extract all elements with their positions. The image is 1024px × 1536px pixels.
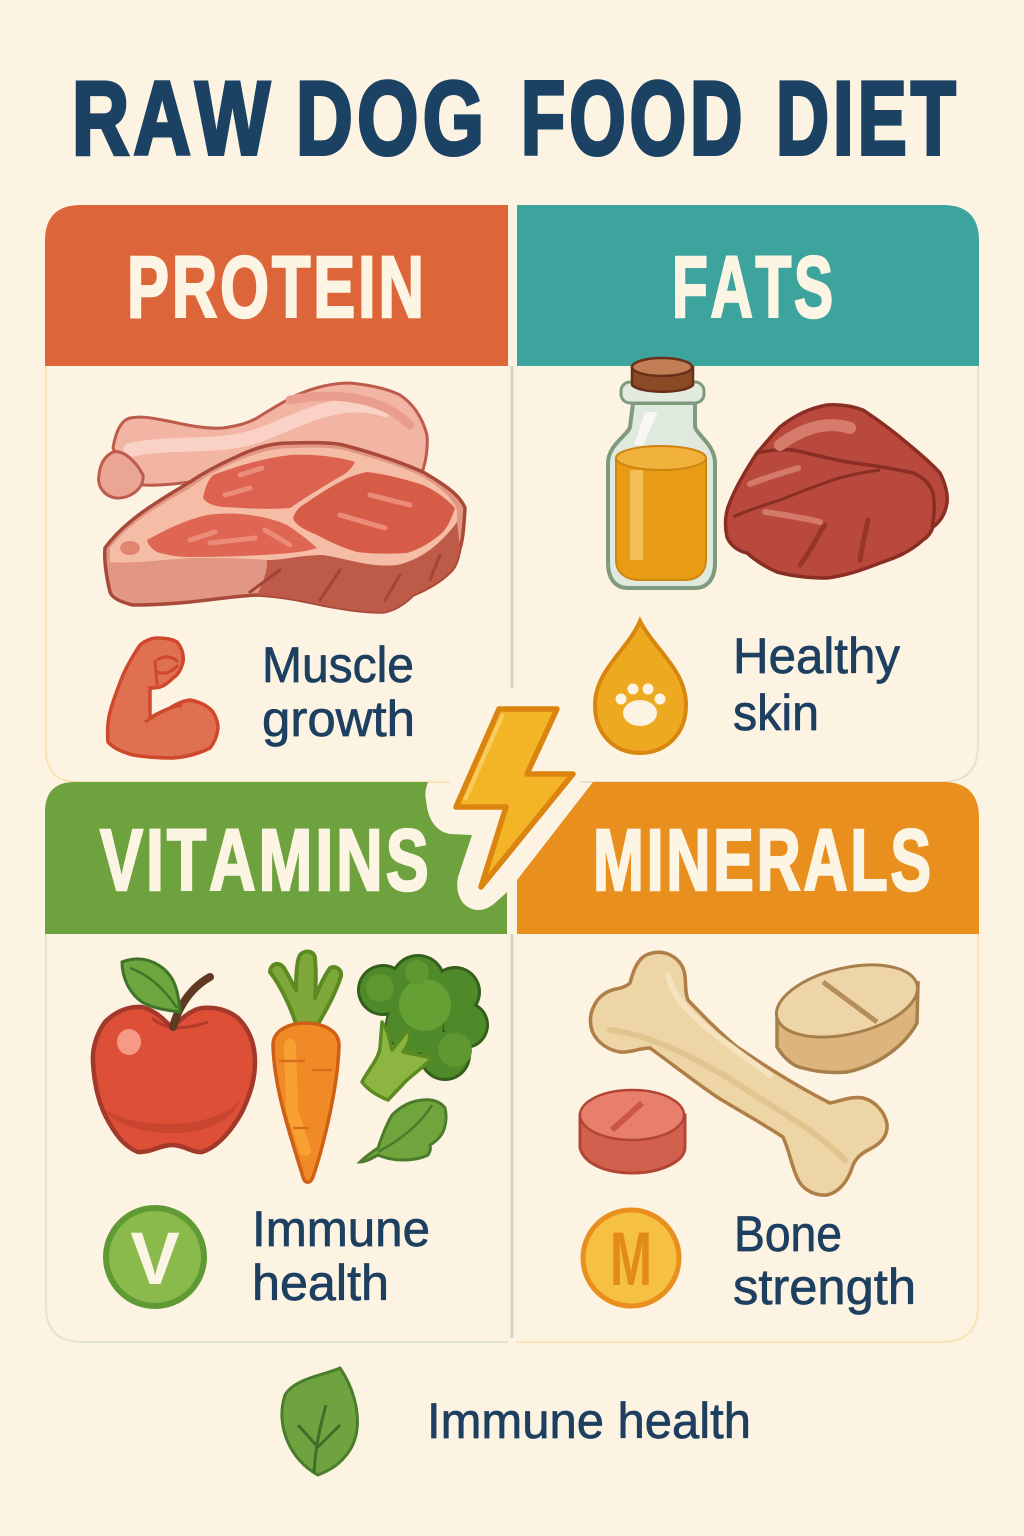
vitamins header [45, 782, 507, 934]
icon: oil bottle [608, 358, 715, 588]
icon: bone [590, 952, 887, 1195]
icon: red tablet [580, 1090, 685, 1173]
label: healthy skin [733, 628, 900, 741]
icon: carrot [270, 952, 341, 1182]
icon: raw steak [105, 443, 465, 612]
label: bone strength: strength [733, 1259, 916, 1315]
title: DIET [776, 62, 960, 177]
title: RAW [72, 59, 274, 177]
label: immune health [252, 1201, 430, 1311]
label: immune health: health [252, 1255, 389, 1311]
label: bone strength [733, 1206, 916, 1315]
icon: leaf [282, 1368, 357, 1475]
label: immune health: Immune [252, 1201, 430, 1257]
label: muscle growth: growth [262, 691, 415, 747]
minerals header: MINERALS [593, 811, 934, 909]
fats header [517, 205, 979, 366]
icon: chicken drumstick [99, 383, 427, 500]
panel: protein [45, 205, 508, 782]
icon: raw meat chunk [726, 405, 947, 578]
title: FOOD [521, 60, 746, 176]
label: bone strength: Bone [734, 1206, 842, 1262]
minerals header [517, 782, 979, 934]
icon: lightning bolt [456, 709, 573, 887]
panel: fats [517, 205, 979, 782]
icon: spinach leaf [360, 1100, 446, 1162]
icon: flexed arm [108, 638, 218, 758]
icon: large tablet [769, 953, 925, 1073]
label: healthy skin: skin [733, 685, 819, 741]
icon: M badge: M [610, 1217, 652, 1302]
icon: broccoli [357, 954, 489, 1100]
label: muscle growth [262, 637, 415, 747]
icon: apple [93, 959, 255, 1152]
icon: V badge [106, 1208, 204, 1306]
fats header: FATS [672, 238, 836, 336]
panel: minerals [517, 782, 979, 1342]
label: healthy skin: Healthy [733, 628, 900, 684]
divider [510, 366, 514, 1338]
panel: vitamins [45, 782, 508, 1342]
title [72, 59, 960, 177]
vitamins header: VITAMINS [100, 813, 432, 909]
protein header: PROTEIN [127, 239, 427, 336]
icon: M badge [583, 1210, 679, 1306]
footer label: Immune health [427, 1393, 751, 1449]
icon: V badge: V [130, 1217, 180, 1300]
label: muscle growth: Muscle [262, 637, 414, 693]
title: DOG [296, 60, 488, 177]
protein header [45, 205, 508, 366]
icon: oil drop with paw [595, 621, 686, 753]
